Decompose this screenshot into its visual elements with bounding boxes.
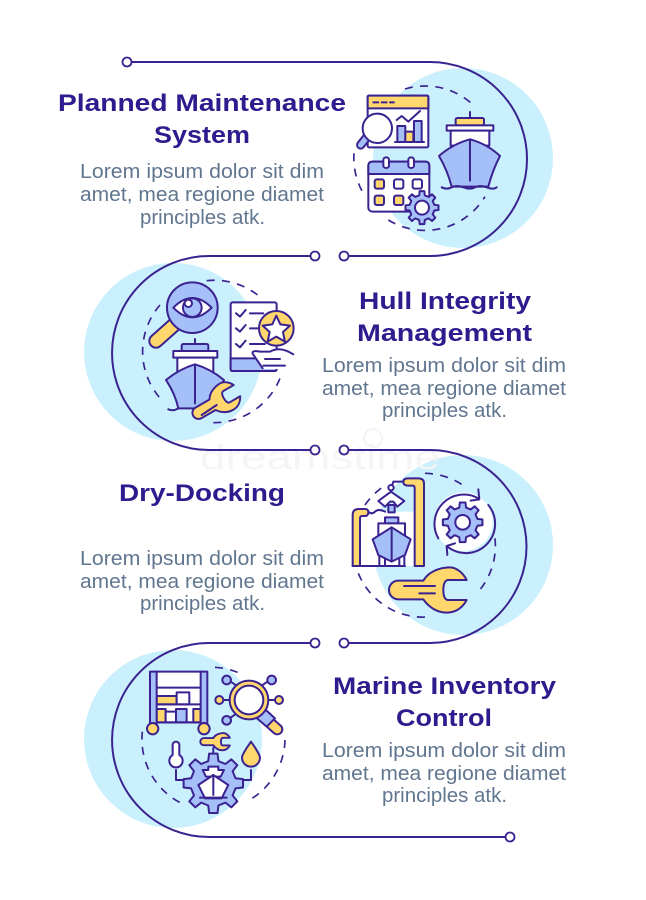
text block: marine inventory description (322, 740, 566, 807)
panel: hull integrity management (143, 280, 566, 429)
background circle: planned maintenance (373, 68, 553, 248)
icon: inventory shelf, magnifier and ship gear (142, 667, 285, 813)
text block: hull integrity description (322, 355, 566, 422)
heading: planned maintenance system: Planned Maintenance (58, 90, 346, 117)
text block: marine inventory description: amet, mea regione diamet (322, 763, 566, 785)
heading: marine inventory control: Marine Inventory (333, 673, 556, 700)
text block: marine inventory description: principles atk. (382, 785, 507, 807)
heading: marine inventory control: Control (396, 705, 492, 732)
icon: hull inspection (143, 280, 294, 429)
text block: dry-docking description: principles atk. (140, 593, 265, 615)
icon: dry dock, gear and wrench (353, 473, 495, 617)
text block: marine inventory description: Lorem ipsum dolor sit dim (322, 740, 566, 762)
heading: planned maintenance system (58, 90, 346, 149)
heading: dry-docking: Dry-Docking (119, 480, 285, 507)
heading: planned maintenance system: System (154, 122, 250, 149)
watermark (200, 429, 440, 477)
background circle: hull integrity (84, 263, 262, 441)
heading: hull integrity management: Management (357, 320, 532, 347)
text block: dry-docking description: Lorem ipsum dolor sit dim (80, 548, 324, 570)
heading: hull integrity management: Hull Integrity (359, 288, 531, 315)
heading: marine inventory control (333, 673, 556, 732)
text block: planned maintenance description: Lorem ipsum dolor sit dim (80, 161, 324, 183)
heading: hull integrity management (357, 288, 532, 347)
text block: planned maintenance description: amet, mea regione diamet (80, 184, 324, 206)
text block: planned maintenance description: principles atk. (140, 207, 265, 229)
text block: dry-docking description (80, 548, 324, 615)
panel: planned maintenance system (58, 86, 500, 230)
panel: marine inventory control (142, 667, 566, 813)
watermark: dreamstime (200, 439, 440, 477)
text block: hull integrity description: principles atk. (382, 400, 507, 422)
text block: hull integrity description: Lorem ipsum dolor sit dim (322, 355, 566, 377)
background circle: dry-docking (373, 455, 553, 635)
text block: dry-docking description: amet, mea regione diamet (80, 571, 324, 593)
text block: hull integrity description: amet, mea regione diamet (322, 378, 566, 400)
connector line: full timeline path (112, 58, 527, 842)
icon: ship, chart and calendar (354, 86, 500, 230)
panel: dry-docking (80, 473, 495, 617)
background circle: marine inventory (84, 650, 262, 828)
text block: planned maintenance description (80, 161, 324, 229)
